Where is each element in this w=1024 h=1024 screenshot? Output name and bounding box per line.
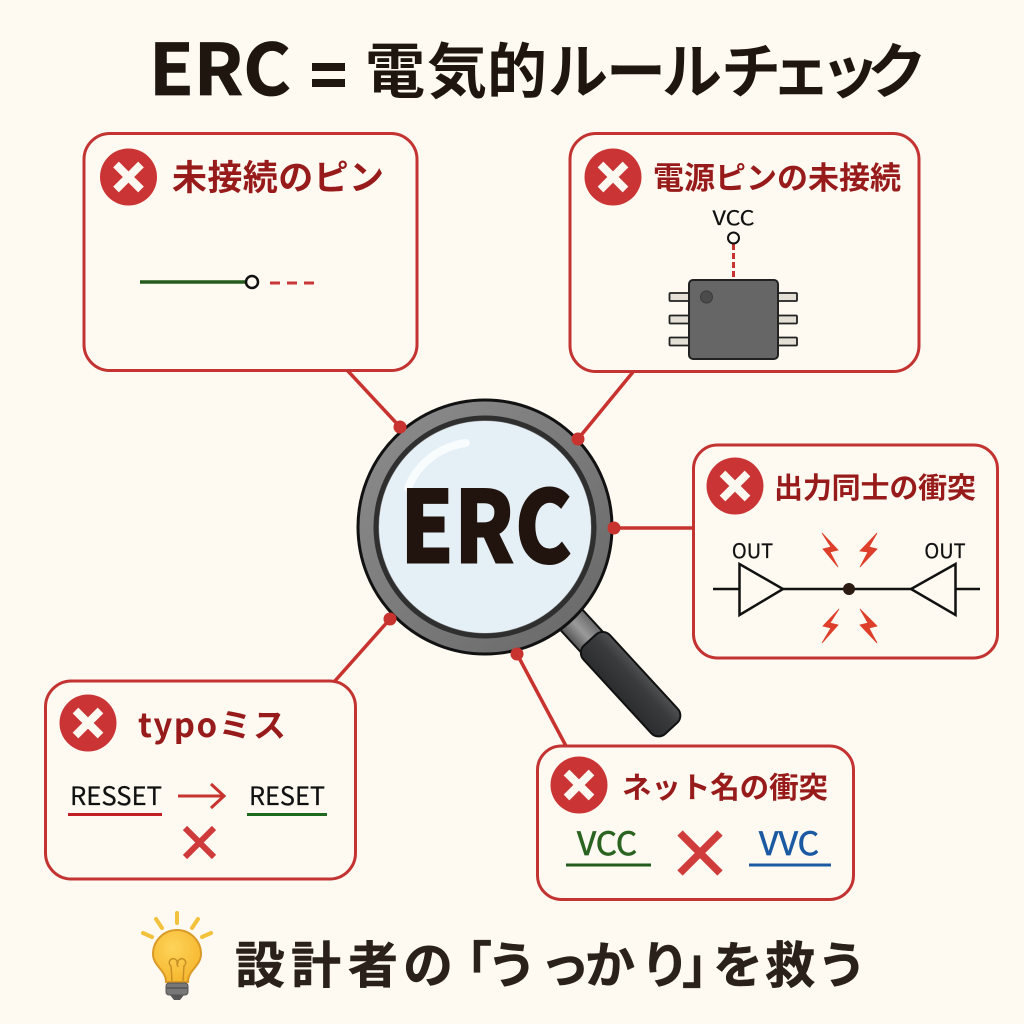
icon: error x xyxy=(60,694,116,752)
label: RESSET: RESSET xyxy=(70,777,162,813)
glass highlight xyxy=(408,443,466,488)
diagram: output conflict xyxy=(713,533,980,643)
panel: 未接続のピン xyxy=(84,134,417,370)
heading: ネット名の衝突: ネット名の衝突 xyxy=(622,765,828,807)
underline: RESSET xyxy=(68,813,162,816)
icon: red cross xyxy=(185,828,214,857)
footer text: 設計者の「うっかり」を救う xyxy=(235,926,867,998)
arrow xyxy=(178,784,224,808)
lens rim xyxy=(358,400,612,654)
label: VCC: VCC xyxy=(712,202,755,231)
heading: 未接続のピン: 未接続のピン xyxy=(172,150,384,201)
diagram: unconnected pin xyxy=(140,276,315,288)
label: VVC blue: VVC xyxy=(759,819,819,865)
connector dots xyxy=(384,420,620,660)
underline: RESET xyxy=(247,813,327,816)
handle xyxy=(550,598,684,741)
underline: VCC xyxy=(566,864,651,866)
diagram: IC chip xyxy=(670,232,797,359)
heading: 電源ピンの未接続: 電源ピンの未接続 xyxy=(653,153,901,198)
icon: light bulb xyxy=(143,913,211,1000)
heading: typoミス: typoミス xyxy=(138,699,286,747)
label: ERC: ERC xyxy=(400,447,572,592)
title: 電気的ルールチェック xyxy=(365,24,927,111)
heading: 出力同士の衝突: 出力同士の衝突 xyxy=(774,465,976,507)
label: RESET: RESET xyxy=(249,777,325,813)
glass xyxy=(379,421,591,633)
label: VCC green: VCC xyxy=(577,819,637,865)
panel: 出力同士の衝突 xyxy=(694,445,998,658)
icon: error x xyxy=(100,148,157,206)
underline: VVC xyxy=(749,864,831,866)
icon: red cross xyxy=(680,833,720,873)
connector lines xyxy=(334,370,693,746)
panel: ネット名の衝突 xyxy=(538,746,854,900)
magnifying glass xyxy=(358,400,684,741)
icon: error x xyxy=(584,148,642,206)
label: OUT left: OUT xyxy=(732,535,773,564)
label: OUT right: OUT xyxy=(924,535,966,564)
panel: 電源ピンの未接続 xyxy=(570,134,919,372)
icon: error x xyxy=(706,458,764,514)
icon: error x xyxy=(550,756,608,814)
panel: typoミス xyxy=(46,681,356,879)
title: ERC xyxy=(149,14,291,116)
title xyxy=(149,14,927,116)
